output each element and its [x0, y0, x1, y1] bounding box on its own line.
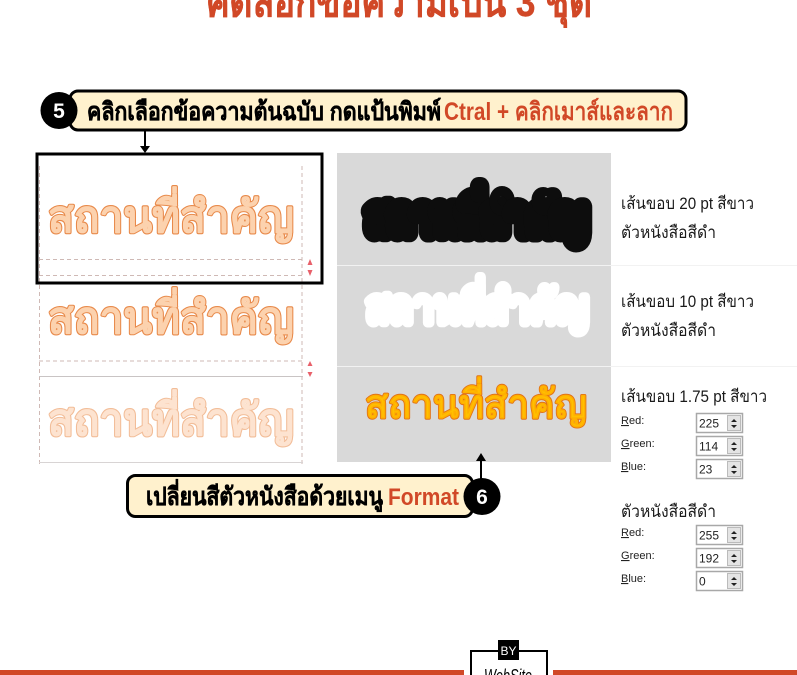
- callout 5 box: [70, 91, 686, 130]
- description 2: เส้นขอบ 10 pt สีขาว: [621, 292, 754, 311]
- panel: grey swatches: [337, 153, 797, 462]
- rgb settings fill: Green:: [621, 550, 655, 562]
- orange sample: สถานที่สำคัญ: [365, 377, 587, 427]
- row dividers: [337, 266, 797, 366]
- text copy 1: สถานที่สำคัญ: [48, 186, 294, 242]
- callout 5 highlight: Ctral + คลิกเมาส์และลาก: [444, 97, 673, 126]
- panel: stacked copies: [37, 154, 322, 467]
- rgb settings outline: Green:: [621, 438, 655, 450]
- callout 6 box: [128, 476, 472, 516]
- rgb settings outline: 23: [699, 462, 713, 476]
- rgb settings fill: Blue:: [621, 573, 646, 585]
- rgb settings fill: Red:: [621, 527, 644, 539]
- swatch backgrounds: [337, 153, 611, 462]
- text copy 3: สถานที่สำคัญ: [48, 389, 294, 445]
- rgb settings fill: [621, 526, 742, 590]
- rgb settings fill: 0: [699, 574, 706, 588]
- number badge 5: 5: [53, 100, 65, 123]
- description 4: ตัวหนังสือสีดำ: [621, 502, 716, 521]
- text copy 3: สถานที่สำคัญ: [48, 389, 294, 445]
- callout 6 text: เปลี่ยนสีตัวหนังสือด้วยเมนู: [146, 479, 383, 513]
- description 1: [621, 194, 754, 242]
- description 2: ตัวหนังสือสีดำ: [621, 321, 716, 340]
- description 2: [621, 292, 754, 340]
- spacing arrows: [308, 259, 312, 377]
- description 1: ตัวหนังสือสีดำ: [621, 223, 716, 242]
- callout 5: [40, 91, 686, 130]
- selection frame: [37, 154, 322, 283]
- number badge 6: 6: [476, 486, 488, 509]
- number badge 6: [464, 478, 500, 515]
- callout 6 highlight: Format: [388, 484, 459, 511]
- rgb settings outline: [621, 414, 742, 478]
- number badge 5: [40, 92, 78, 129]
- callout 5 text: คลิกเลือกข้อความต้นฉบับ กดแป้นพิมพ์: [87, 97, 441, 126]
- rgb settings outline: Blue:: [621, 461, 646, 473]
- description 3: เส้นขอบ 1.75 pt สีขาว: [621, 387, 767, 406]
- arrow up to swatch: [476, 453, 486, 480]
- guide lines: [39, 166, 303, 467]
- text copy 2: สถานที่สำคัญ: [48, 287, 294, 343]
- white outline sample: สถานที่สำคัญ: [366, 276, 588, 332]
- rgb settings outline: Red:: [621, 415, 644, 427]
- rgb settings fill: 255: [699, 528, 719, 542]
- rgb settings fill: 192: [699, 552, 719, 566]
- arrow down to selection: [140, 131, 150, 153]
- text copy 2: สถานที่สำคัญ: [48, 287, 294, 343]
- footer logo: [471, 640, 547, 675]
- black outline sample: สถานที่สำคัญ: [367, 186, 586, 242]
- footer logo: BY: [500, 644, 517, 658]
- footer bars: [0, 670, 797, 675]
- rgb settings outline: 225: [699, 416, 719, 430]
- orange sample: สถานที่สำคัญ: [365, 377, 587, 427]
- text copy 1: สถานที่สำคัญ: [48, 186, 294, 242]
- description 1: เส้นขอบ 20 pt สีขาว: [621, 194, 754, 213]
- rgb settings outline: 114: [699, 440, 718, 454]
- callout 6: [128, 476, 500, 516]
